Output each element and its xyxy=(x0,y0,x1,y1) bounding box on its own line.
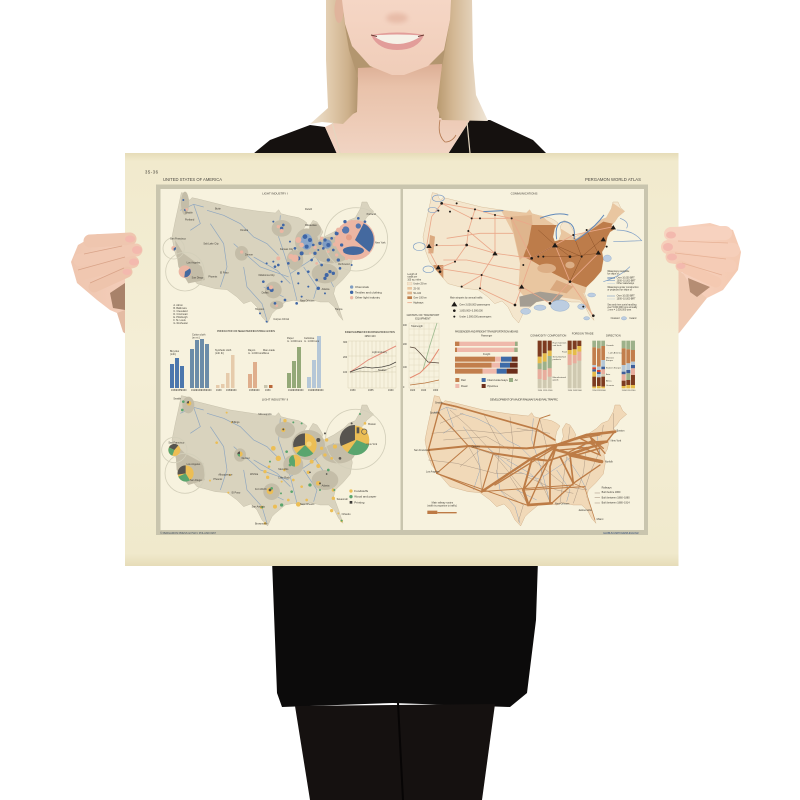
dark roads over the east xyxy=(532,230,603,282)
city labels: Seattle xyxy=(435,401,443,404)
legend: waterways and ports: over 5,000,000 tons annually xyxy=(607,306,638,309)
icon: right hand gripping poster xyxy=(663,223,741,298)
panel: map light industry I xyxy=(163,192,388,325)
map symbols xyxy=(162,397,386,525)
map title: LIGHT INDUSTRY I xyxy=(262,192,288,196)
pie: San Francisco xyxy=(168,444,180,456)
grid xyxy=(409,323,439,388)
line: pipeline xyxy=(410,380,439,385)
legend: waterways and ports: for ships of: xyxy=(607,273,620,276)
city labels: Boston xyxy=(368,423,377,426)
panel: map light industry II xyxy=(162,396,386,526)
bar labels: 1950 xyxy=(171,389,177,392)
map title: DEVELOPMENT OF MAJOR RAILWAYS AND RAIL TRAFFIC xyxy=(490,398,558,402)
bars: paper xyxy=(287,347,301,388)
pie: Denver xyxy=(237,451,243,457)
axis labels: 0 xyxy=(403,387,405,389)
year labels: 1950 xyxy=(568,390,573,392)
legend: city key: A. Akron xyxy=(173,304,183,307)
loose hair strands xyxy=(332,122,470,153)
line: total xyxy=(350,362,396,372)
icon: left hand gripping poster xyxy=(71,234,142,313)
year labels: 1950 xyxy=(538,390,543,392)
bar labels: m. 1.000 tons xyxy=(248,352,264,355)
year labels: 1950 xyxy=(622,390,627,392)
city labels: Los Angeles xyxy=(187,261,201,264)
city labels: New Orleans xyxy=(300,300,315,303)
city labels xyxy=(168,397,378,525)
legend: road density xyxy=(407,273,427,305)
line: air xyxy=(423,323,437,370)
bar labels: 1939 xyxy=(196,389,202,392)
city labels: Oklahoma City xyxy=(258,274,275,277)
black top xyxy=(253,120,547,154)
city labels: Seattle xyxy=(185,211,193,214)
bars: cellulose xyxy=(307,336,321,388)
legend: city key: D. Cincinnati xyxy=(173,313,188,316)
axis labels xyxy=(403,325,439,392)
legend: waterways and ports: Sea and river ports handling xyxy=(607,303,637,306)
chart title: PASSENGER AND FREIGHT TRANSPORTATION MEANS xyxy=(455,330,519,334)
axis labels: 1960 xyxy=(388,389,394,392)
legend: main railway routes: Main railway routes xyxy=(432,501,454,504)
legend: light industry xyxy=(350,285,382,300)
legend: road density: 25–50 xyxy=(413,288,421,290)
waterways xyxy=(483,211,604,241)
credit: GLOBUS CARTOGRAPHICAL W.Z. xyxy=(603,531,639,535)
city labels: Albuquerque xyxy=(218,474,233,477)
bar labels: 1950 xyxy=(226,389,232,392)
city labels: Milwaukee xyxy=(305,224,317,227)
bars: rayon xyxy=(248,362,257,388)
bar labels: Rayon xyxy=(248,349,256,352)
bar labels: 1960 xyxy=(318,389,324,392)
axis labels: 100 xyxy=(403,367,408,369)
legend: transport modes: Inland waterways xyxy=(487,378,509,382)
curl on the chest xyxy=(439,120,456,142)
year labels: 1955 xyxy=(597,390,602,392)
secondary railways xyxy=(428,410,613,522)
map symbols xyxy=(163,192,388,325)
year labels: 1960 xyxy=(577,390,583,392)
legend: airports: Over 3,000,000 passengers xyxy=(459,304,491,307)
city labels: New Orleans xyxy=(300,503,315,506)
city labels: Boston xyxy=(617,430,625,433)
legend: city key: B. Baltimore xyxy=(173,307,187,310)
legend: airports xyxy=(450,297,492,319)
city labels: Norfolk xyxy=(605,461,614,464)
chart: foreign trade commodity composition: FOREIGN TRADE xyxy=(572,332,594,336)
dress xyxy=(272,560,538,707)
stack labels: Europe xyxy=(606,359,614,362)
city labels: Los Angeles xyxy=(187,463,201,466)
chart title: GROWTH OF TRANSPORT xyxy=(407,313,440,317)
city labels: Salt Lake City xyxy=(203,242,219,245)
bars: man-made fibres xyxy=(264,385,272,388)
stack labels: Food xyxy=(562,352,568,354)
stack labels: Manufactured xyxy=(553,376,567,379)
stack labels: Oceania xyxy=(606,385,615,387)
city labels: San Francisco xyxy=(170,237,186,240)
panel: map railways xyxy=(414,396,630,526)
copyright: © PERGAMON PRESS & P.W.N. POLAND 1967 xyxy=(160,531,216,535)
chart: production of selected industrial goods xyxy=(170,329,324,392)
legend: light industry: Other light industry xyxy=(355,296,381,300)
year labels: 1960 xyxy=(601,390,607,392)
legend: light industry: Textiles and clothing xyxy=(355,290,382,294)
legend: light industry II: Wood and paper xyxy=(354,495,376,499)
legend: railways by date xyxy=(595,486,630,504)
legs xyxy=(295,704,495,800)
legend: airports: Under 1,000,000 passengers xyxy=(459,316,492,319)
face xyxy=(342,0,451,75)
pie: San Francisco xyxy=(171,246,176,251)
bar labels: 1929 xyxy=(288,389,294,392)
pie: New York region xyxy=(340,425,369,455)
legend: airports: Main airports by annual traffic xyxy=(450,297,483,300)
city labels: New York xyxy=(611,440,622,443)
bar labels: 1955 xyxy=(176,389,182,392)
city labels: Minneapolis xyxy=(258,413,272,416)
bar labels: Man-made xyxy=(263,349,276,352)
legend: railways by date: Built between 1880–1914 xyxy=(602,501,630,504)
legend: airports: 1,000,000–3,000,000 xyxy=(459,310,483,313)
stacked bars: exports xyxy=(568,341,581,388)
legend: waterways and ports: or projected for ships of: xyxy=(607,289,633,292)
stack labels: Asia xyxy=(606,373,611,376)
bars: synthetic cloth xyxy=(216,355,234,388)
legend: railways by date: Built before 1860 xyxy=(602,491,621,494)
bar labels: 1929 xyxy=(191,389,197,392)
bar labels: 1960 xyxy=(206,389,212,392)
highways xyxy=(427,203,613,316)
legend: city key: C. Cleveland xyxy=(173,310,188,313)
bar labels: (mill.) xyxy=(170,353,176,356)
stack labels: Latin America xyxy=(609,351,623,354)
pie: Los Angeles xyxy=(179,265,191,278)
bar labels: (mill. lb) xyxy=(215,352,224,355)
axis labels: 1940 xyxy=(421,390,427,392)
bar labels: 1950 xyxy=(249,389,255,392)
right hair xyxy=(437,0,488,121)
line: rail xyxy=(410,347,439,363)
map shading and routes xyxy=(407,195,642,320)
legend: road density: Length of xyxy=(407,273,417,276)
bar labels: Paper xyxy=(287,337,294,340)
axis labels: 100 xyxy=(343,371,348,374)
bar labels: 1960 xyxy=(254,389,260,392)
legend: waterways and ports: 1000–10,000 BRT xyxy=(617,280,636,282)
year labels: 1950 xyxy=(592,390,598,392)
axis labels: 400 xyxy=(403,325,408,327)
year labels xyxy=(538,390,636,392)
city labels: Butte xyxy=(215,207,221,210)
stack labels: Canada xyxy=(606,345,614,347)
city labels: Fort Worth xyxy=(255,488,267,491)
pie: St Louis xyxy=(289,455,301,467)
pie: Chicago xyxy=(293,433,317,457)
axis labels xyxy=(343,341,394,392)
axis labels: 200 xyxy=(403,344,408,346)
city labels: Houston xyxy=(255,308,265,311)
stack labels: products xyxy=(553,358,561,361)
line: light industry xyxy=(350,346,396,372)
city labels: San Francisco xyxy=(168,441,185,444)
road density shading xyxy=(428,203,630,320)
legend: road density: 50–100 xyxy=(413,293,422,295)
city labels: Portland xyxy=(185,219,195,222)
bar labels: (m mi.) xyxy=(192,336,200,340)
city labels: Omaha xyxy=(240,229,249,232)
city labels: Tampa xyxy=(335,308,343,311)
city labels: Phoenix xyxy=(213,478,223,481)
legend: road density: 100 sq. miles xyxy=(407,279,422,281)
city labels: Seattle xyxy=(173,397,182,400)
airports xyxy=(426,202,616,317)
city labels: Savannah xyxy=(337,498,348,501)
bars: bicycles xyxy=(170,358,184,388)
bar labels: 1950 xyxy=(313,389,319,392)
city labels: Atlanta xyxy=(322,288,330,291)
chart title: INDEX NUMBER OF INDUSTRIAL PRODUCTION xyxy=(345,330,395,334)
legend: road density: Highways xyxy=(413,303,424,305)
legend: waterways and ports: 1 mm = 1,000,000 tons xyxy=(607,309,632,312)
legend: waterways and ports: Waterways under construction xyxy=(607,286,639,289)
stack labels: goods xyxy=(553,380,559,382)
city labels: New York xyxy=(375,241,386,244)
city labels: Portland xyxy=(367,213,377,216)
stack labels: Semi-finished xyxy=(553,356,567,358)
legend: transport modes: Road xyxy=(461,384,468,388)
gulf ports xyxy=(521,255,611,320)
bar labels: 1960 xyxy=(231,389,237,392)
stack labels: and fuels xyxy=(553,345,561,347)
legend: waterways and ports xyxy=(607,270,639,320)
axis labels: Textiles xyxy=(378,369,387,372)
chart: index number of industrial production xyxy=(343,330,396,392)
bars: cotton cloth xyxy=(190,339,209,388)
axis labels: 1960 xyxy=(433,390,439,392)
stack labels: Africa xyxy=(606,380,612,383)
rail map xyxy=(414,396,630,526)
stack labels xyxy=(553,341,623,387)
neck and chest xyxy=(325,64,470,154)
city labels: Atlanta xyxy=(322,485,330,488)
chart: growth of transport equipment: EQUIPMENT xyxy=(415,316,431,320)
legend: waterways and ports: Other waterways xyxy=(617,282,635,285)
dots: foodstuffs xyxy=(209,412,366,525)
heading: Pergamon World Atlas: PERGAMON WORLD ATLAS xyxy=(585,177,641,182)
map base xyxy=(172,193,374,323)
bar labels: 1929 xyxy=(308,389,314,392)
frame xyxy=(156,184,648,535)
legend: waterways and ports: 1000–10,000 BRT xyxy=(617,299,636,301)
year labels: 1955 xyxy=(543,390,548,392)
arms xyxy=(108,284,126,334)
bar labels: 1939 xyxy=(216,389,222,392)
stack labels: Western xyxy=(606,356,615,359)
stack labels: Eastern Europe xyxy=(606,366,622,369)
legend: road density: roads per xyxy=(407,276,417,279)
chart title: COMMODITY COMPOSITION xyxy=(530,334,566,338)
line: textiles xyxy=(350,366,396,373)
nose shadow xyxy=(386,13,408,23)
bar labels: m. 1.000 tons xyxy=(287,340,303,343)
axis labels: 1950 xyxy=(350,389,356,392)
city labels: Corpus Christi xyxy=(273,318,290,321)
page number: 35-36 xyxy=(145,170,159,174)
city labels: San Diego xyxy=(190,479,202,482)
legend: main railway routes: (width in proportion to traffic) xyxy=(427,504,457,507)
city labels: Kansas City xyxy=(280,248,294,251)
chart: index number of industrial production: 1950=100 xyxy=(364,335,376,338)
city labels: Duluth xyxy=(305,208,313,211)
city labels: Miami xyxy=(597,518,604,521)
legend: light industry II: Printing xyxy=(354,500,365,504)
legend: transport modes: Pipelines xyxy=(487,384,499,388)
bar labels: Cellulose xyxy=(304,337,315,340)
axis labels: Light industry xyxy=(372,351,388,354)
map base xyxy=(423,193,625,323)
city labels: San Francisco xyxy=(414,449,430,452)
city labels: El Paso xyxy=(220,271,229,274)
city labels: Phoenix xyxy=(208,276,218,279)
legend: city key xyxy=(173,304,188,325)
line: road xyxy=(410,349,439,378)
city labels xyxy=(414,401,625,521)
city labels: Denver xyxy=(472,445,480,448)
city labels: Los Angeles xyxy=(426,471,440,474)
pie: New York region xyxy=(335,220,375,260)
legend: city key: G. Rochester xyxy=(173,322,188,325)
city labels: Denver xyxy=(245,254,253,257)
stacked bars: passenger xyxy=(455,342,518,352)
left hair xyxy=(310,0,358,124)
heading: United States of America: UNITED STATES OF AMERICA xyxy=(163,177,222,182)
grid xyxy=(348,341,396,388)
stacked bars: direction of imports xyxy=(592,341,605,388)
legend: waterways and ports: Over 10,000 BRT xyxy=(617,277,635,280)
year labels: 1960 xyxy=(631,390,636,392)
smile xyxy=(371,32,424,50)
stack labels: Raw materials xyxy=(553,341,566,344)
stacked bars: freight xyxy=(455,357,518,374)
axis labels: 1955 xyxy=(368,389,374,392)
legend: waterways and ports: Waterways navigable xyxy=(607,270,630,273)
city labels: Memphis xyxy=(278,468,289,471)
map title: LIGHT INDUSTRY II xyxy=(262,398,288,402)
year labels: 1955 xyxy=(626,390,632,392)
legend: transport modes xyxy=(455,378,518,388)
chart: growth of transport equipment xyxy=(403,313,440,392)
chart: passenger and freight transportation means: Freight xyxy=(483,353,491,356)
bar labels: Bicycles xyxy=(170,350,180,353)
stacked bars: imports xyxy=(538,341,552,388)
bar labels: m. 1.000 tons xyxy=(304,340,320,343)
map title: COMMUNICATIONS xyxy=(511,192,537,196)
legend: waterways and ports: Inward xyxy=(629,317,637,320)
city labels: Billings xyxy=(232,421,240,424)
panel: map communications xyxy=(407,192,642,323)
model: person holding the poster xyxy=(108,0,707,800)
chart: passenger and freight transportation means xyxy=(455,330,519,388)
legend: transport modes: Rail xyxy=(461,378,466,382)
legend: city key: E. Pittsburgh xyxy=(173,316,188,319)
bar labels: 1960 xyxy=(181,389,187,392)
legend: railways by date: Built between 1860–1880 xyxy=(602,496,630,499)
legend: railways by date: Railways xyxy=(602,486,612,489)
pie: Seattle xyxy=(181,400,191,411)
legend: light industry II: Foodstuffs xyxy=(354,489,369,493)
dots: chemicals and textiles xyxy=(182,199,366,323)
city labels: Dallas xyxy=(262,291,269,294)
hair shadow behind the neck xyxy=(340,0,455,118)
stacked bars: direction of exports xyxy=(622,341,635,388)
poster sheet xyxy=(125,153,678,566)
year labels: 1955 xyxy=(573,390,578,392)
city labels: Richmond xyxy=(338,263,350,266)
city labels: New Orleans xyxy=(555,502,570,505)
bar labels xyxy=(170,334,324,392)
chart: foreign trade commodity composition xyxy=(530,332,636,392)
city labels: Denver xyxy=(242,457,250,460)
year labels: 1960 xyxy=(548,390,553,392)
chart title: PRODUCTION OF SELECTED INDUSTRIAL GOODS xyxy=(217,329,275,333)
city labels: Orlando xyxy=(342,513,351,516)
city labels xyxy=(170,207,386,321)
legend: main railway routes xyxy=(427,501,457,514)
legend: transport modes: Air xyxy=(515,378,518,382)
main railway routes xyxy=(428,403,615,520)
bar labels: 1960 xyxy=(298,389,304,392)
ear xyxy=(334,0,344,23)
chart: foreign trade commodity composition: DIRECTION xyxy=(606,334,621,338)
legend: city key: F. St. Louis xyxy=(173,319,186,322)
bar labels: 1950 xyxy=(293,389,299,392)
axis labels: 300 xyxy=(343,341,348,344)
bar labels: fibres xyxy=(263,352,270,355)
chart: passenger and freight transportation means: Passenger xyxy=(481,335,492,338)
legend: light industry II xyxy=(349,489,376,504)
pie: Los Angeles xyxy=(178,465,194,482)
bar labels: Cotton cloth xyxy=(192,334,206,336)
city labels: Brownsville xyxy=(255,522,268,525)
city labels: San Antonio xyxy=(252,505,266,508)
map base xyxy=(172,396,374,526)
city labels: Wichita xyxy=(250,473,259,476)
city labels: Spokane xyxy=(430,411,440,414)
legend: waterways and ports: Outward xyxy=(611,317,620,320)
legend: road density: Under 25 km xyxy=(413,283,427,286)
axis labels: 200 xyxy=(343,356,348,359)
city labels: Little Rock xyxy=(278,476,291,479)
bar labels: Synthetic cloth xyxy=(215,349,232,352)
city labels: El Paso xyxy=(232,491,241,494)
legend: waterways and ports: Over 10,000 BRT xyxy=(617,295,635,298)
bar labels: 1950 xyxy=(201,389,207,392)
city labels: San Diego xyxy=(192,276,204,279)
legend: light industry: Chemicals xyxy=(355,285,369,289)
axis labels: 1920 xyxy=(410,390,416,392)
city labels: New York xyxy=(367,443,378,446)
legend: road density: Over 100 km xyxy=(413,297,427,300)
city labels: Jacksonville xyxy=(578,509,592,512)
bar labels: 1950 xyxy=(265,389,271,392)
axis labels: Total length xyxy=(411,325,423,328)
